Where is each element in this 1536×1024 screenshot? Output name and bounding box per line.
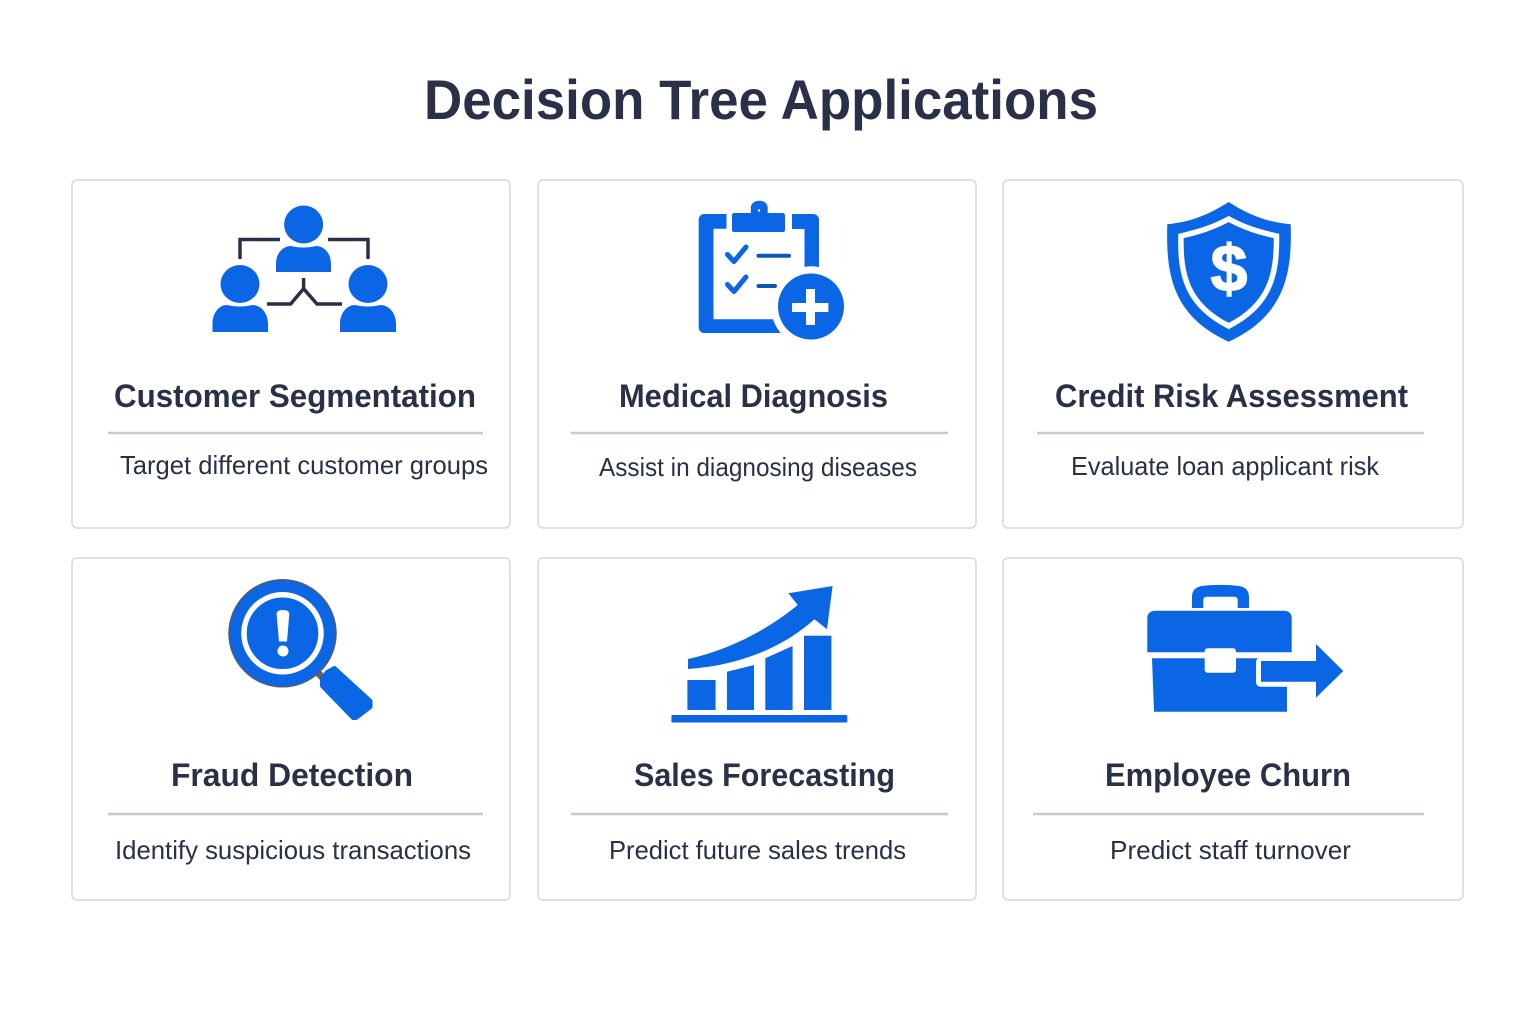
title: Decision Tree Applications — [424, 68, 1098, 131]
icon: shield with dollar — [1167, 202, 1291, 342]
heading: Medical Diagnosis — [619, 378, 888, 414]
panel: customer segmentation — [72, 180, 510, 528]
icon: clipboard with plus — [699, 201, 844, 340]
icon: magnifier with exclamation — [229, 580, 370, 718]
icon: people hierarchy — [212, 206, 396, 332]
panel: sales forecasting — [538, 558, 976, 900]
description: Predict future sales trends — [609, 835, 906, 865]
panel: fraud detection — [72, 558, 510, 900]
panel: employee churn — [1003, 558, 1463, 900]
heading: Sales Forecasting — [634, 757, 895, 793]
description: Predict staff turnover — [1110, 835, 1351, 865]
description: Assist in diagnosing diseases — [599, 452, 917, 482]
description: Identify suspicious transactions — [115, 835, 471, 865]
icon: briefcase with exit arrow — [1147, 585, 1343, 712]
heading: Employee Churn — [1105, 757, 1351, 793]
icon: rising bar chart with arrow — [671, 586, 847, 722]
heading: Credit Risk Assessment — [1055, 378, 1408, 414]
heading: Customer Segmentation — [114, 378, 476, 414]
icon: shield with dollar: $ — [1211, 231, 1247, 305]
panel: medical diagnosis — [538, 180, 976, 528]
description: Target different customer groups — [120, 450, 488, 480]
panel: credit risk assessment — [1003, 180, 1463, 528]
description: Evaluate loan applicant risk — [1071, 451, 1380, 481]
heading: Fraud Detection — [171, 757, 413, 793]
